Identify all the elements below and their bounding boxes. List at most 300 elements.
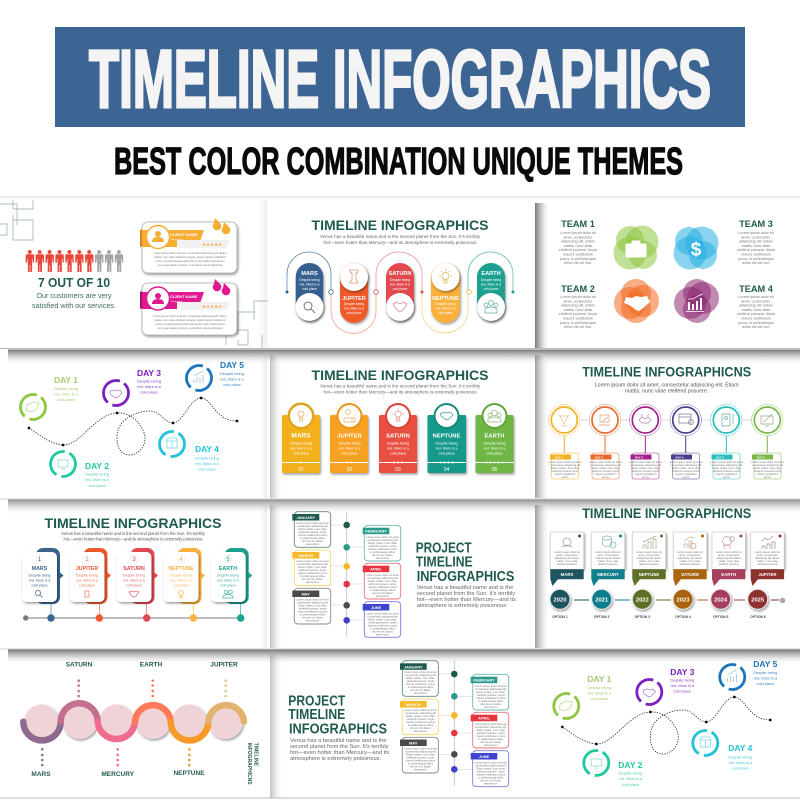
day 5: [181, 360, 245, 396]
box: June: JUNE: [479, 754, 490, 759]
team 1 text: amet, consectetur: [563, 235, 593, 239]
card: Mars: cold place: [293, 452, 309, 456]
card: Jupiter 2025: eleifend posuere: [757, 562, 778, 566]
box: February: Etiam mattis, nunc vitae: [368, 541, 397, 545]
planet labels: NEPTUNE: [173, 770, 205, 777]
milestone 5: consectetur adipiscing elit: [711, 463, 742, 467]
heading: PROJECT: [288, 693, 345, 709]
box: January: mauris vestibulum purus: [298, 533, 328, 537]
card: Earth 2024: [711, 532, 745, 619]
icon: handshake on orange blob: [614, 279, 659, 323]
year connectors: [574, 599, 779, 601]
card: Saturn: Despite being: [387, 442, 409, 446]
card: Saturn: Despite being: [123, 574, 145, 578]
team 4 text: [737, 284, 775, 329]
client card orange: Designation: [171, 238, 183, 241]
pill: Saturn: Despite being: [390, 278, 410, 282]
card: Neptune: NEPTUNE: [168, 566, 194, 572]
box: February: consectetur adipiscing elit: [367, 538, 398, 542]
card: Saturn: SATURN: [123, 566, 145, 572]
description: Venus has a beautiful name and is the: [417, 585, 513, 591]
card: Saturn: [116, 548, 158, 622]
box: May: Lorem ipsum dolor sit amet: [296, 598, 329, 602]
box: June: elit vel nisl. Etiam: [480, 778, 502, 782]
heading: [288, 693, 387, 737]
day 5: DAY 5: [753, 659, 778, 669]
heading: INFOGRAPHICS: [417, 569, 515, 585]
card: Mars: [22, 548, 64, 622]
vertical axis: [331, 512, 365, 637]
box: January: elementum: [414, 691, 428, 695]
description: [290, 738, 389, 762]
box: May: Lorem ipsum dolor sit amet: [404, 746, 437, 750]
client card orange: Lorem ipsum dolor sit amet, consectetur adipiscing elit. Etiam: [153, 251, 227, 255]
card: Mars 2020: 2020: [554, 598, 566, 604]
card: Earth: Despite being: [217, 574, 239, 578]
box: May: in pellentesque tellus: [408, 762, 434, 766]
card: Earth 2024: mattis, nunc vitae: [718, 559, 740, 563]
box: January: consectetur adipiscing elit: [297, 524, 328, 528]
box: February: elementum: [484, 705, 498, 709]
day 3: red, Mars is a: [137, 384, 162, 389]
box: May: elit vel nisl. Etiam: [410, 764, 432, 768]
pill: Mars: red, Mars is a: [300, 282, 320, 286]
card: Neptune: cold place: [438, 452, 455, 456]
milestone 2: DAY 2: [595, 455, 603, 459]
card: Saturn 2023: mattis, nunc vitae: [680, 559, 701, 563]
box: March: MARCH: [406, 702, 421, 707]
team 3 text: mauris vestibulum: [741, 252, 771, 256]
connector line: [580, 419, 752, 421]
team 1 text: mattis, nunc vitae: [564, 244, 592, 248]
day 1: Despite being: [54, 386, 78, 391]
description: [417, 585, 516, 609]
day 1: [15, 375, 79, 425]
card: Earth: EARTH: [219, 566, 237, 572]
team 1 text: Lorem ipsum dolor sit: [560, 231, 596, 235]
dotted stems: [41, 679, 227, 766]
day 4: red, Mars is a: [195, 461, 220, 466]
planet labels: SATURN: [66, 661, 93, 668]
card: Jupiter: Despite being: [339, 442, 360, 446]
day 1: red, Mars is a: [588, 690, 612, 696]
day 3: Despite being: [137, 378, 161, 384]
card: Saturn 2023: [673, 532, 707, 619]
description: hot—even hotter than Mercury—and its atmosphere is extremely poisonous: [324, 240, 477, 245]
milestone 4: Lorem ipsum dolor sit amet: [670, 460, 702, 464]
box: April: Lorem ipsum dolor sit amet: [474, 722, 507, 726]
milestone 2: eleifend posuere turpis: [592, 469, 620, 473]
milestone 4: mauris vestibulum: [675, 472, 698, 476]
milestone 5: Etiam mattis, nunc vitae: [712, 466, 741, 470]
milestone 5: purus: [723, 475, 731, 479]
card: Jupiter 2025: 2025: [751, 598, 765, 604]
client card magenta: CLIENT NAME: [170, 294, 198, 299]
description: [320, 234, 481, 245]
box: April: Lorem ipsum dolor sit amet: [366, 573, 399, 577]
connector arcs: [287, 252, 513, 334]
box: April: APRIL: [478, 716, 490, 721]
team 3 text: [737, 219, 775, 265]
card: Saturn: cold place: [390, 452, 406, 456]
card: Mars: red, Mars is a: [29, 578, 50, 582]
day 2: Despite being: [618, 770, 642, 776]
box: February: in pellentesque tellus: [478, 699, 504, 703]
card: Neptune: NEPTUNE: [433, 434, 460, 440]
milestone 5: Lorem ipsum dolor sit amet: [710, 460, 743, 464]
panel: teams: [559, 219, 775, 329]
client card magenta: [140, 279, 237, 335]
pill: Mars: cold place: [302, 287, 317, 291]
client card magenta: ★★★★★: [202, 304, 223, 309]
card: Earth 2024: adipiscing elit. Etiam: [716, 556, 742, 560]
card: Neptune 2022: NEPTUNE: [639, 572, 659, 577]
day 4: DAY 4: [728, 743, 753, 753]
box: January: Etiam mattis, nunc vitae: [298, 527, 327, 531]
team 3 text: TEAM 3: [739, 219, 773, 229]
box: April: eleifend posuere, turpis: [369, 582, 397, 586]
card: Earth 2024: 2024: [714, 598, 728, 604]
team 4 text: amet, consectetur: [741, 299, 771, 303]
card: Jupiter: red, Mars is a: [339, 446, 360, 450]
description: hot—even hotter than Mercury—and its: [290, 750, 389, 756]
client card orange: nunc eget sapien pretium, ut tincidunt mauris dignissim: [157, 263, 223, 267]
milestone 2: Lorem ipsum dolor sit amet: [589, 460, 622, 464]
milestone 1: Lorem ipsum dolor sit amet: [549, 460, 581, 464]
box: March: elit vel nisl. Etiam: [302, 577, 324, 581]
card: Saturn 2023: eleifend posuere: [680, 562, 700, 566]
box: June: consectetur adipiscing elit: [475, 764, 506, 768]
card: Jupiter 2025: adipiscing elit. Etiam: [755, 556, 780, 560]
team 2 text: tellus elit vel nisl.: [564, 325, 592, 329]
milestone 3: Etiam mattis, nunc vitae: [631, 466, 660, 470]
box: April: in pellentesque tellus: [370, 588, 396, 592]
box: February: eleifend posuere, turpis: [369, 544, 397, 548]
box: May: [292, 588, 331, 624]
box: April: elementum: [376, 594, 390, 598]
box: June: eleifend posuere, turpis: [369, 620, 397, 624]
heading: TIMELINE INFOGRAPHICS: [312, 217, 488, 233]
pill: Jupiter: Despite being: [344, 302, 364, 306]
icon: briefcase on green blob: [614, 226, 658, 270]
day 5: Despite being: [220, 371, 244, 376]
panel: planet cards: [282, 367, 514, 473]
team 3 text: Lorem ipsum dolor sit: [738, 231, 774, 235]
team 2 text: eleifend posuere, turpis: [559, 312, 597, 316]
milestone 2: purus: [602, 475, 610, 479]
box: June: Lorem ipsum dolor sit amet: [366, 612, 399, 616]
milestone 1: eleifend posuere turpis: [551, 469, 579, 473]
team 4 text: tellus elit vel nisl.: [742, 325, 770, 329]
heading: TIMELINE INFOGRAPHICNS: [582, 365, 751, 380]
day 5: red, Mars is a: [754, 676, 778, 680]
day 2: cold place: [88, 483, 106, 488]
milestone 5: eleifend posuere turpis: [713, 469, 741, 473]
planet labels: MARS: [31, 771, 51, 778]
stat text: satisfied with our services.: [32, 301, 116, 310]
milestone 6: Lorem ipsum dolor sit amet: [751, 460, 784, 464]
day 3: [632, 667, 695, 710]
day 3: DAY 3: [137, 368, 161, 378]
milestone 2: mauris vestibulum: [595, 472, 617, 476]
description: [320, 384, 481, 394]
card: Mars: Despite being: [290, 442, 312, 446]
box: March: eleifend posuere, turpis: [407, 717, 435, 721]
card: Earth 2024: Lorem ipsum dolor sit: [716, 550, 742, 554]
pill: Saturn: cold place: [393, 287, 408, 291]
panel: planet pills timeline: [286, 217, 514, 334]
pill: Jupiter: JUPITER: [342, 296, 366, 302]
day 2: [579, 746, 643, 787]
card: Mercury 2021: amet, consectetur: [597, 553, 619, 557]
team 4 text: Lorem ipsum dolor sit: [738, 295, 774, 299]
box: June: elit vel nisl. Etiam: [372, 630, 394, 634]
milestone 5: [710, 404, 743, 479]
day 4: Despite being: [728, 754, 752, 760]
box: March: Etiam mattis, nunc vitae: [298, 565, 327, 569]
wave ribbon: [23, 703, 244, 740]
day 4: [688, 726, 753, 770]
card: Mercury 2021: mattis, nunc vitae: [598, 559, 619, 563]
box: April: elit vel nisl. Etiam: [480, 740, 502, 744]
day 1: DAY 1: [54, 375, 78, 385]
day 1: cold place: [57, 397, 75, 402]
day 4: red, Mars is a: [729, 760, 753, 765]
card: Neptune 2022: amet, consectetur: [638, 553, 660, 557]
box: March: in pellentesque tellus: [408, 723, 434, 727]
pill: Earth: Despite being: [481, 278, 501, 282]
box: June: elementum: [376, 632, 390, 636]
box: February: mauris vestibulum purus: [368, 547, 398, 551]
day 5: cold place: [757, 681, 774, 686]
card: Earth: red, Mars is a: [484, 446, 505, 450]
box: March: Lorem ipsum dolor sit amet: [296, 559, 329, 563]
day 2: red, Mars is a: [619, 776, 643, 781]
card: Earth 2024: EARTH: [721, 572, 736, 577]
box: March: consectetur adipiscing elit: [297, 562, 328, 566]
card: Mars 2020: mattis, nunc vitae: [557, 559, 578, 563]
team 4 text: eleifend posuere, turpis: [737, 312, 775, 316]
panel: snake wave timeline: [23, 661, 258, 785]
description: Venus has a beautiful name and is the second planet from the Sun. It's terribly: [320, 234, 481, 239]
team 4 text: mattis, nunc vitae: [742, 308, 770, 312]
card: Earth: cold place: [220, 584, 236, 588]
card: Neptune: Despite being: [170, 574, 192, 578]
card: Mars: 1: [38, 557, 42, 563]
box: February: mauris vestibulum purus: [476, 696, 506, 700]
panel: yearly options timeline: [550, 506, 785, 619]
box: April: consectetur adipiscing elit: [475, 725, 506, 729]
card: Jupiter: cold place: [341, 452, 358, 456]
card: Mercury 2021: OPTION 2: [594, 615, 610, 619]
milestone 6: mauris vestibulum: [757, 472, 779, 476]
card: Saturn: 03: [395, 467, 401, 473]
day 5: [715, 659, 778, 695]
day 3: Despite being: [670, 678, 694, 682]
dotted route: [561, 696, 772, 754]
pictogram: 7 out of 10 people: [26, 250, 123, 272]
card: Saturn 2023: Lorem ipsum dolor sit: [677, 550, 703, 554]
panel: numbered cards timeline: [22, 515, 252, 622]
box: March: eleifend posuere, turpis: [299, 568, 327, 572]
day 4: cold place: [198, 466, 216, 472]
card: Earth 2024: eleifend posuere: [719, 562, 739, 566]
heading: TIMELINE: [288, 707, 346, 723]
day 4: [155, 427, 220, 472]
day 4: cold place: [732, 766, 749, 770]
box: April: mauris vestibulum purus: [476, 734, 506, 738]
team 1 text: TEAM 1: [561, 219, 595, 229]
team 1 text: tellus elit vel nisl.: [564, 261, 592, 265]
heading: TIMELINE INFOGRAPHICS: [312, 367, 488, 383]
card: Saturn: SATURN: [386, 434, 410, 440]
team 2 text: TEAM 2: [561, 284, 595, 294]
card: Mars 2020: adipiscing elit. Etiam: [555, 556, 580, 560]
box: May: mauris vestibulum purus: [406, 758, 436, 762]
heading: INFOGRAPHICS: [289, 721, 387, 737]
box: March: in pellentesque tellus: [300, 574, 326, 578]
day 3: [98, 368, 162, 411]
card: Neptune 2022: Lorem ipsum dolor sit: [636, 550, 662, 554]
card: Mercury 2021: 2021: [595, 598, 609, 604]
box: March: mauris vestibulum purus: [298, 571, 328, 575]
card: Jupiter 2025: [748, 532, 784, 619]
card: Mars: 01: [298, 467, 304, 473]
milestone 4: DAY 4: [676, 455, 684, 459]
day 4: Despite being: [195, 456, 219, 460]
milestone 1: mauris vestibulum: [554, 472, 577, 476]
box: January: consectetur adipiscing elit: [405, 673, 436, 677]
box: May: eleifend posuere, turpis: [299, 606, 327, 610]
card: Earth: [476, 403, 514, 473]
card: Saturn: red, Mars is a: [123, 578, 145, 582]
box: May: Etiam mattis, nunc vitae: [298, 604, 327, 608]
card: Saturn: 3: [132, 557, 136, 563]
box: April: consectetur adipiscing elit: [367, 576, 398, 580]
planet labels: MERCURY: [101, 771, 135, 778]
milestone 2: [589, 404, 622, 479]
milestone 5: DAY 5: [716, 455, 724, 459]
card: Jupiter: JUPITER: [337, 434, 363, 440]
card: Neptune 2022: adipiscing elit. Etiam: [637, 556, 662, 560]
team 1 text: mauris vestibulum: [563, 252, 593, 256]
card: Saturn 2023: adipiscing elit. Etiam: [678, 556, 703, 560]
client card orange: [140, 218, 237, 273]
box: March: consectetur adipiscing elit: [405, 711, 436, 715]
card: Jupiter: Despite being: [76, 574, 98, 578]
box: June: Etiam mattis, nunc vitae: [476, 766, 505, 770]
team 3 text: purus, in pellentesque: [738, 257, 774, 261]
day 5: DAY 5: [220, 360, 244, 370]
box: February: [363, 525, 401, 561]
card: Neptune: cold place: [173, 584, 189, 588]
box: March: MARCH: [299, 553, 313, 558]
box: May: MAY: [302, 592, 310, 596]
box: June: in pellentesque tellus: [478, 776, 504, 780]
box: June: Lorem ipsum dolor sit amet: [474, 760, 507, 764]
card: Neptune: [428, 403, 466, 473]
team 4 text: TEAM 4: [739, 284, 774, 294]
card: Mercury 2021: adipiscing elit. Etiam: [596, 556, 621, 560]
box: May: elementum: [414, 768, 428, 772]
day 3: DAY 3: [670, 667, 695, 677]
card: Neptune 2022: eleifend posuere: [639, 562, 659, 566]
icon: dollar on blue blob: [674, 226, 718, 270]
heading: PROJECT: [416, 541, 472, 557]
card: Jupiter: 02: [347, 467, 352, 473]
team 2 text: mattis, nunc vitae: [564, 308, 592, 312]
card: Saturn 2023: OPTION 4: [675, 615, 691, 619]
card: Earth: 05: [492, 467, 497, 473]
milestone 4: eleifend posuere turpis: [672, 469, 700, 473]
card: Neptune: red, Mars is a: [170, 578, 192, 582]
box: May: elementum: [306, 618, 320, 622]
day 3: cold place: [140, 390, 158, 394]
icon: bar chart on purple blob: [674, 279, 719, 323]
box: March: mauris vestibulum purus: [406, 720, 436, 724]
client card magenta: Designation: [171, 300, 183, 303]
title banner: [55, 27, 745, 127]
box: February: elementum: [376, 556, 390, 560]
card: Saturn: [379, 403, 417, 473]
box: January: elementum: [306, 542, 320, 546]
team 2 text: adipiscing elit. Etiam: [561, 304, 595, 308]
pill: Earth: EARTH: [481, 271, 501, 277]
box: January: Lorem ipsum dolor sit amet: [296, 521, 329, 525]
milestone 4: [670, 404, 702, 479]
box: January: elit vel nisl. Etiam: [410, 688, 432, 692]
day 3: cold place: [674, 688, 691, 694]
box: February: [471, 674, 509, 710]
milestone 4: consectetur adipiscing elit: [671, 463, 702, 467]
description: Venus has a beautiful name and is the: [290, 738, 386, 744]
box: January: in pellentesque tellus: [300, 536, 326, 540]
team 3 text: adipiscing elit. Etiam: [739, 240, 773, 244]
panel: day roadmap repeat: [549, 659, 778, 787]
description: hot—even hotter than Mercury—and its: [417, 597, 516, 603]
pill: Mars: Despite being: [299, 278, 320, 282]
card: Jupiter 2025: JUPITER: [758, 572, 777, 577]
milestone 3: purus: [642, 475, 650, 479]
box: February: eleifend posuere, turpis: [477, 693, 505, 697]
description: hot—even hotter than Mercury—and its atmosphere is extremely poisonous: [64, 536, 203, 542]
card: Saturn 2023: SATURN: [681, 572, 699, 577]
card: Earth: [211, 548, 252, 622]
client card magenta: purus, in pellentesque tellus elit vel nisl. Etiam elementum: [156, 322, 225, 326]
box: February: Etiam mattis, nunc vitae: [476, 690, 505, 694]
day 2: DAY 2: [85, 461, 109, 471]
client card magenta: Lorem ipsum dolor sit amet, consectetur adipiscing elit. Etiam: [153, 314, 227, 318]
milestone 3: consectetur adipiscing elit: [630, 463, 661, 467]
box: March: elementum: [306, 580, 320, 584]
card: Earth: cold place: [486, 452, 503, 456]
milestone 6: DAY 6: [757, 455, 765, 459]
card: Earth: Despite being: [484, 442, 505, 446]
box: April: [363, 563, 401, 599]
card: Mars 2020: MARS: [561, 572, 573, 577]
box: June: [363, 602, 401, 637]
milestone 3: [629, 404, 662, 479]
box: January: in pellentesque tellus: [408, 685, 434, 689]
box: March: Etiam mattis, nunc vitae: [406, 714, 435, 718]
team 2 text: [559, 284, 597, 329]
card: Saturn: red, Mars is a: [387, 446, 409, 450]
description: second planet from the Sun. It's terribly: [290, 744, 389, 750]
rotated heading: INFOGRAPHICNS: [246, 743, 252, 785]
box: February: elit vel nisl. Etiam: [480, 702, 502, 706]
box: January: eleifend posuere, turpis: [299, 530, 327, 534]
pill: Neptune: cold place: [438, 311, 453, 315]
